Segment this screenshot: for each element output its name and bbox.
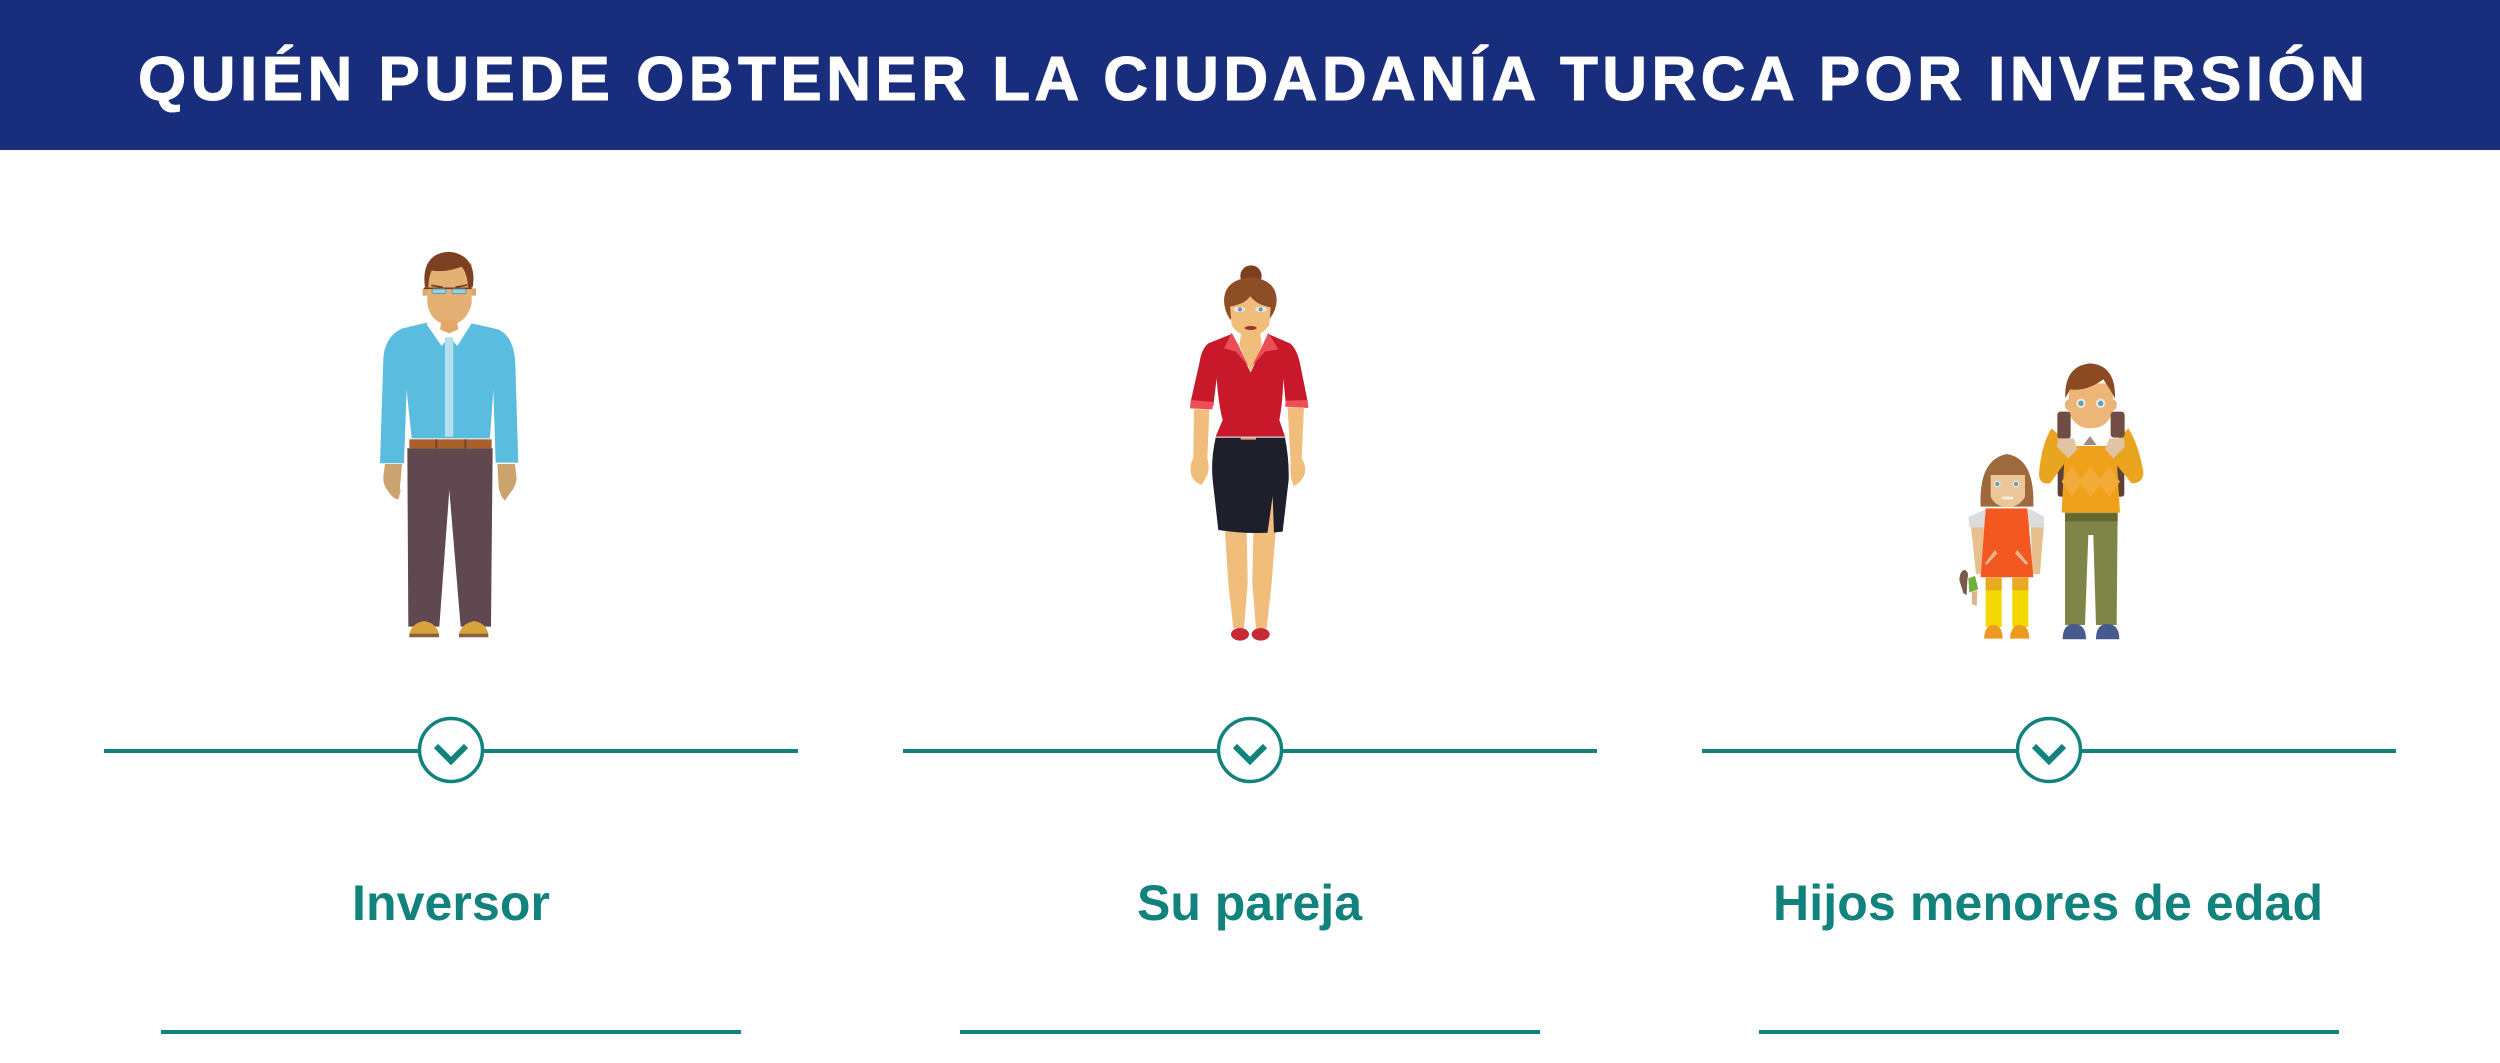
bottom rule — [161, 1030, 741, 1034]
header band — [0, 0, 2500, 150]
panel: hijos menores de edad — [1702, 363, 2396, 1034]
divider with chevron — [903, 718, 1597, 782]
boy — [2039, 363, 2143, 639]
divider with chevron — [1702, 718, 2396, 782]
title: QUIÉN PUEDE OBTENER LA CIUDADANÍA TURCA POR INVERSIÓN — [138, 45, 2365, 114]
girl — [1968, 454, 2044, 639]
bottom rule — [1759, 1030, 2339, 1034]
icon: man figure — [380, 252, 518, 637]
label: inversor: Inversor — [352, 875, 550, 931]
icon: woman figure — [1190, 265, 1308, 641]
label: hijos menores de edad: Hijos menores de edad — [1773, 875, 2323, 931]
panel: su pareja — [903, 265, 1597, 1034]
bottom rule — [960, 1030, 1540, 1034]
divider with chevron — [104, 718, 798, 782]
label: su pareja: Su pareja — [1137, 875, 1363, 931]
icon: children figures — [1959, 363, 2143, 639]
panel: inversor — [104, 252, 798, 1034]
doll — [1959, 570, 1978, 606]
